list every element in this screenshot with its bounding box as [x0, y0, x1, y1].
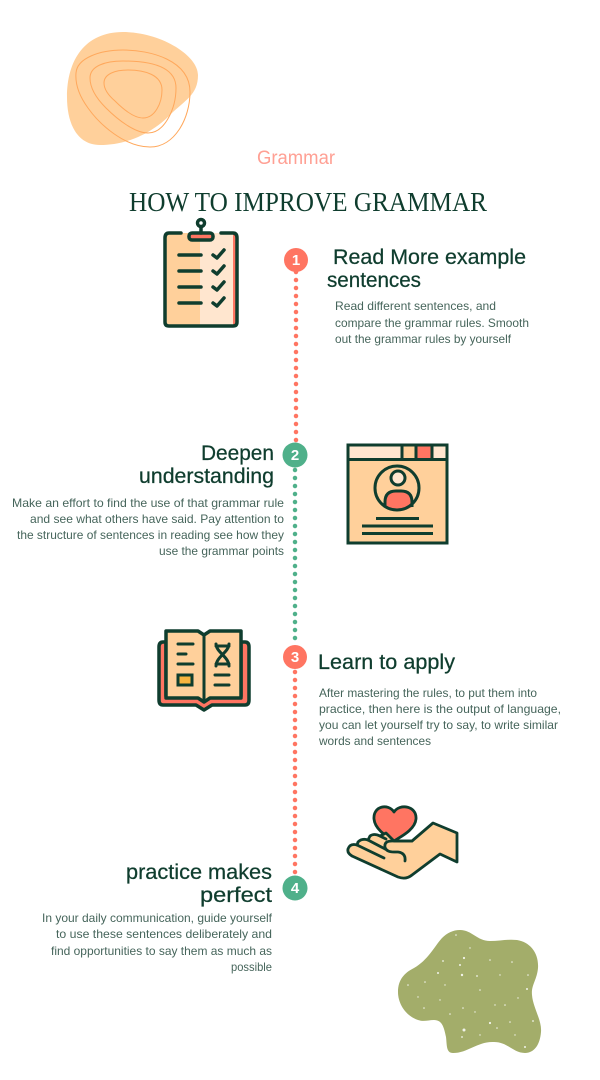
step 2 heading: Deepen — [201, 441, 274, 465]
icon: hand holding heart — [348, 807, 457, 878]
step 3 marker: 3 — [291, 649, 299, 666]
step 2 body text: the structure of sentences in reading see how they — [17, 528, 284, 542]
timeline: dotted connectors — [295, 272, 296, 876]
step 1 body text: Read different sentences, and — [335, 299, 496, 313]
category label: Grammar: Grammar — [257, 148, 336, 169]
step 4 marker — [282, 876, 308, 900]
step 4 body text: to use these sentences deliberately and — [56, 927, 272, 941]
step 2 body text: and see what others have said. Pay attention to — [30, 512, 284, 526]
step 1 body text: compare the grammar rules. Smooth — [335, 316, 529, 330]
step 2 heading — [139, 441, 274, 488]
step 1 heading: sentences — [327, 268, 421, 292]
step 4 heading: perfect — [200, 883, 272, 907]
step 4 body text: In your daily communication, guide yourself — [42, 911, 273, 925]
step 3 body text: words and sentences — [318, 734, 431, 748]
step 1 body text — [335, 299, 529, 346]
step 1 body text: out the grammar rules by yourself — [335, 332, 512, 346]
step 3 body text: After mastering the rules, to put them into — [319, 686, 537, 700]
step 2 heading: understanding — [139, 464, 274, 488]
step 3 body text: practice, then here is the output of language, — [319, 702, 561, 716]
step 3 heading: Learn to apply — [318, 650, 455, 674]
step 1 marker — [284, 248, 308, 272]
step 2 marker: 2 — [291, 447, 299, 464]
step 3 body text: you can let yourself try to say, to write similar — [319, 718, 558, 732]
step 2 body text: Make an effort to find the use of that grammar rule — [12, 496, 284, 510]
step 3 marker — [283, 645, 307, 669]
step 4 heading: practice makes — [126, 860, 272, 884]
icon: profile window — [348, 445, 447, 543]
step 4 marker: 4 — [291, 880, 300, 897]
step 4 body text — [42, 911, 273, 974]
decorative orange blob with contour lines — [67, 32, 198, 147]
step 2 body text: use the grammar points — [159, 544, 284, 558]
step 1 heading — [327, 245, 526, 292]
step 1 heading: Read More example — [333, 245, 526, 269]
icon: open book — [159, 631, 249, 710]
step 3 body text — [318, 686, 561, 748]
step 4 heading — [126, 860, 272, 907]
title: HOW TO IMPROVE GRAMMAR — [129, 187, 487, 217]
icon: clipboard checklist — [165, 220, 237, 326]
decorative green speckled blob — [398, 930, 541, 1053]
step 1 marker: 1 — [292, 252, 300, 269]
step 4 body text: possible — [231, 960, 272, 974]
step 2 marker — [282, 442, 308, 468]
step 4 body text: find opportunities to say them as much as — [51, 944, 272, 958]
step 2 body text — [12, 496, 284, 558]
